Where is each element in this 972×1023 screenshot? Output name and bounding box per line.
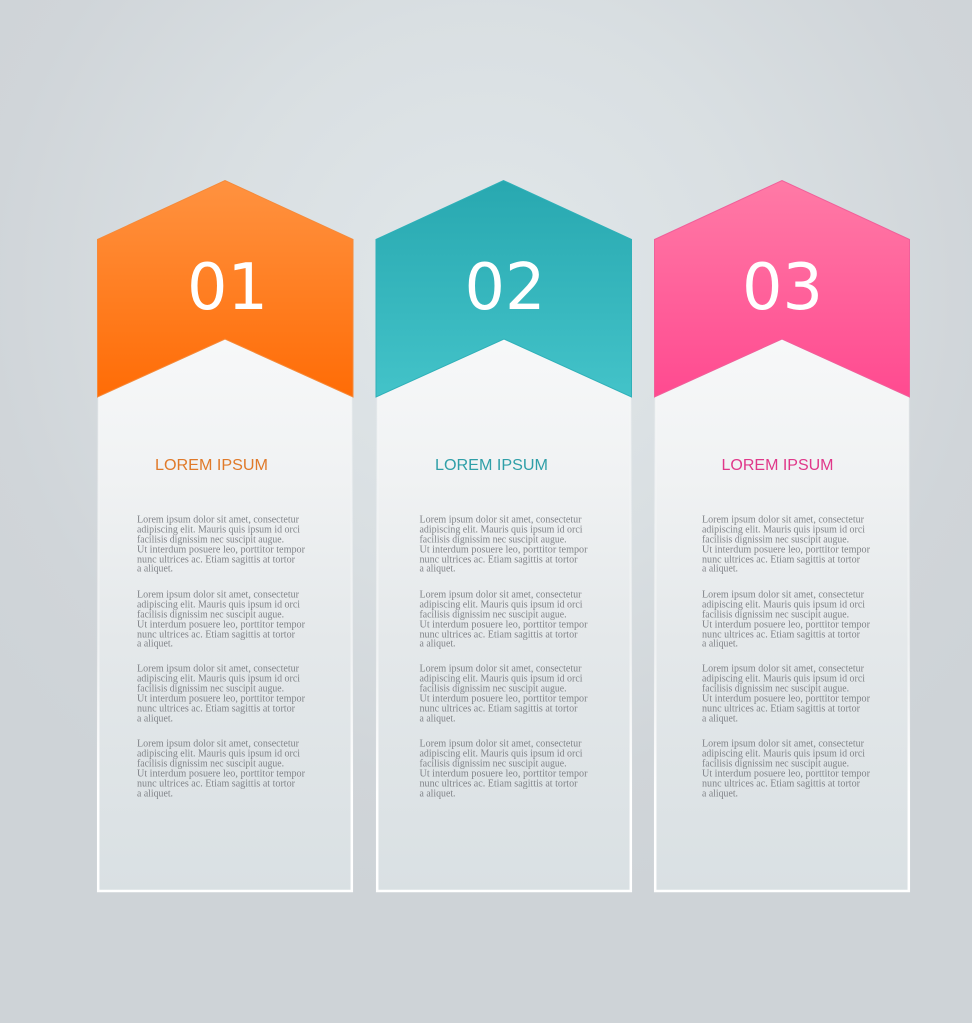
- body text 02: [420, 514, 588, 800]
- panel: column 03: [654, 180, 910, 891]
- body text 02: nunc ultrices ac. Etiam sagittis at tortor: [420, 554, 578, 566]
- body text 01: a aliquet.: [137, 638, 173, 650]
- body text 01: Lorem ipsum dolor sit amet, consectetur: [137, 514, 299, 526]
- body text 01: facilisis dignissim nec suscipit augue.: [137, 684, 284, 694]
- body text 03: facilisis dignissim nec suscipit augue.: [702, 610, 849, 620]
- body text 03: a aliquet.: [702, 564, 738, 574]
- heading 03: LOREM IPSUM: [722, 457, 834, 474]
- body text 02: a aliquet.: [420, 788, 456, 800]
- number 03: 03: [742, 251, 823, 325]
- body text 03: facilisis dignissim nec suscipit augue.: [702, 534, 849, 546]
- body text 01: facilisis dignissim nec suscipit augue.: [137, 610, 284, 620]
- body text 02: facilisis dignissim nec suscipit augue.: [420, 534, 566, 546]
- body text 01: facilisis dignissim nec suscipit augue.: [137, 758, 284, 770]
- body text 01: Ut interdum posuere leo, porttitor tempor: [137, 544, 305, 556]
- body text 01: nunc ultrices ac. Etiam sagittis at tortor: [137, 630, 295, 640]
- body text 01: Lorem ipsum dolor sit amet, consectetur: [137, 738, 299, 750]
- body text 02: nunc ultrices ac. Etiam sagittis at tortor: [420, 630, 578, 640]
- body text 02: nunc ultrices ac. Etiam sagittis at tortor: [420, 778, 578, 790]
- body text 03: Lorem ipsum dolor sit amet, consectetur: [702, 514, 864, 526]
- body text 01: Ut interdum posuere leo, porttitor tempor: [137, 694, 305, 704]
- body text 03: Lorem ipsum dolor sit amet, consectetur: [702, 590, 864, 600]
- number 02: 02: [464, 251, 546, 325]
- body text 01: adipiscing elit. Mauris quis ipsum id orci: [137, 600, 300, 610]
- body text 03: adipiscing elit. Mauris quis ipsum id orci: [702, 600, 865, 610]
- body text 01: facilisis dignissim nec suscipit augue.: [137, 534, 284, 546]
- body text 03: a aliquet.: [702, 714, 738, 724]
- body text 03: nunc ultrices ac. Etiam sagittis at tortor: [702, 630, 860, 640]
- body text 01: nunc ultrices ac. Etiam sagittis at tortor: [137, 704, 295, 714]
- panel: column 02: [376, 180, 632, 891]
- body text 03: adipiscing elit. Mauris quis ipsum id orci: [702, 524, 865, 536]
- body text 02: a aliquet.: [420, 564, 456, 574]
- body text 02: adipiscing elit. Mauris quis ipsum id orci: [420, 524, 583, 536]
- body text 02: Ut interdum posuere leo, porttitor tempor: [420, 694, 588, 704]
- body text 01: nunc ultrices ac. Etiam sagittis at tortor: [137, 554, 295, 566]
- body text 03: nunc ultrices ac. Etiam sagittis at tortor: [702, 778, 860, 790]
- body text 01: a aliquet.: [137, 714, 173, 724]
- body text 01: Lorem ipsum dolor sit amet, consectetur: [137, 590, 299, 600]
- body text 02: a aliquet.: [420, 638, 456, 650]
- body text 01: adipiscing elit. Mauris quis ipsum id orci: [137, 748, 300, 760]
- chevron header 03: [654, 180, 910, 397]
- body text 03: adipiscing elit. Mauris quis ipsum id orci: [702, 674, 865, 684]
- body text 02: facilisis dignissim nec suscipit augue.: [420, 758, 566, 770]
- body text 01: a aliquet.: [137, 564, 173, 574]
- body text 01: Ut interdum posuere leo, porttitor tempor: [137, 620, 305, 630]
- card body 03: [655, 339, 909, 891]
- body text 02: Ut interdum posuere leo, porttitor tempor: [420, 544, 588, 556]
- body text 02: Lorem ipsum dolor sit amet, consectetur: [420, 514, 582, 526]
- body text 03: facilisis dignissim nec suscipit augue.: [702, 684, 849, 694]
- body text 03: a aliquet.: [702, 638, 738, 650]
- body text 01: a aliquet.: [137, 788, 173, 800]
- body text 03: facilisis dignissim nec suscipit augue.: [702, 758, 849, 770]
- body text 02: a aliquet.: [420, 714, 456, 724]
- card body 02: [377, 339, 631, 891]
- body text 03: Ut interdum posuere leo, porttitor tempor: [702, 768, 870, 780]
- body text 01: [137, 514, 305, 800]
- body text 02: Lorem ipsum dolor sit amet, consectetur: [420, 664, 582, 674]
- chevron header 02: [376, 180, 632, 397]
- body text 03: nunc ultrices ac. Etiam sagittis at tortor: [702, 554, 860, 566]
- body text 03: adipiscing elit. Mauris quis ipsum id orci: [702, 748, 865, 760]
- card body 01: [98, 339, 352, 891]
- body text 01: nunc ultrices ac. Etiam sagittis at tortor: [137, 778, 295, 790]
- body text 03: [702, 514, 870, 800]
- body text 03: Lorem ipsum dolor sit amet, consectetur: [702, 738, 864, 750]
- body text 02: adipiscing elit. Mauris quis ipsum id orci: [420, 748, 583, 760]
- body text 03: Lorem ipsum dolor sit amet, consectetur: [702, 664, 864, 674]
- body text 02: Ut interdum posuere leo, porttitor tempor: [420, 768, 588, 780]
- number 01: 01: [187, 251, 268, 325]
- body text 02: nunc ultrices ac. Etiam sagittis at tortor: [420, 704, 578, 714]
- heading 01: LOREM IPSUM: [155, 457, 268, 474]
- chevron header 01: [98, 180, 353, 397]
- body text 02: Ut interdum posuere leo, porttitor tempor: [420, 620, 588, 630]
- body text 02: Lorem ipsum dolor sit amet, consectetur: [420, 590, 582, 600]
- body text 01: adipiscing elit. Mauris quis ipsum id orci: [137, 674, 300, 684]
- body text 03: Ut interdum posuere leo, porttitor tempor: [702, 694, 870, 704]
- body text 02: Lorem ipsum dolor sit amet, consectetur: [420, 738, 582, 750]
- body text 03: Ut interdum posuere leo, porttitor tempor: [702, 544, 870, 556]
- body text 03: a aliquet.: [702, 788, 738, 800]
- body text 01: Ut interdum posuere leo, porttitor tempor: [137, 768, 305, 780]
- body text 02: adipiscing elit. Mauris quis ipsum id orci: [420, 674, 583, 684]
- body text 02: facilisis dignissim nec suscipit augue.: [420, 610, 566, 620]
- body text 03: nunc ultrices ac. Etiam sagittis at tortor: [702, 704, 860, 714]
- panel: column 01: [98, 180, 353, 891]
- body text 02: facilisis dignissim nec suscipit augue.: [420, 684, 566, 694]
- body text 03: Ut interdum posuere leo, porttitor tempor: [702, 620, 870, 630]
- heading 02: LOREM IPSUM: [435, 457, 548, 474]
- body text 01: Lorem ipsum dolor sit amet, consectetur: [137, 664, 299, 674]
- body text 01: adipiscing elit. Mauris quis ipsum id orci: [137, 524, 300, 536]
- body text 02: adipiscing elit. Mauris quis ipsum id orci: [420, 600, 583, 610]
